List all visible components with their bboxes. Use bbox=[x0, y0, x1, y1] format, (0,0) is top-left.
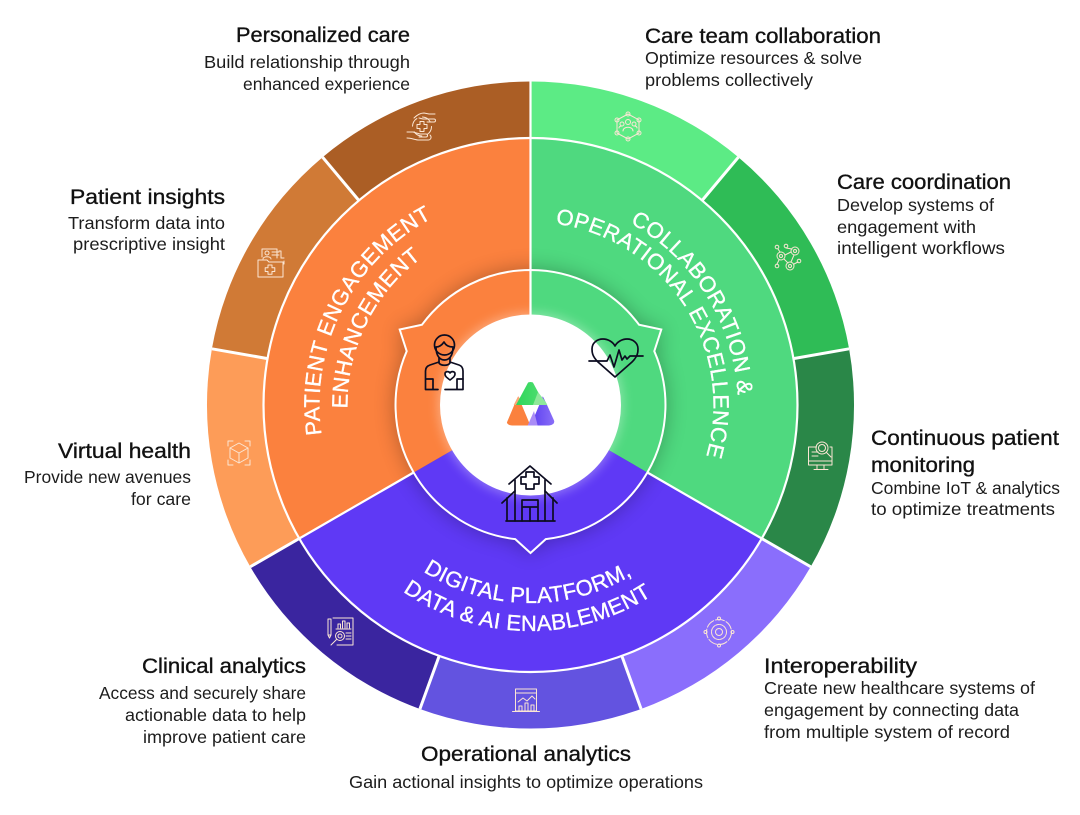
description: intelligent workflows bbox=[837, 238, 1005, 258]
middle ring sectors bbox=[264, 138, 797, 672]
icon: hospital bbox=[502, 466, 557, 521]
label: continuous patient monitoring: monitoring bbox=[871, 454, 975, 477]
heading: Operational analytics bbox=[421, 743, 631, 766]
heading: Care coordination bbox=[837, 171, 1011, 194]
curved title: collaboration: COLLABORATION & bbox=[633, 212, 752, 395]
description: engagement with bbox=[837, 217, 976, 237]
segment: care team collaboration bbox=[530, 82, 738, 405]
curved title: patient engagement enhancement: PATIENT ENGAGEMENT bbox=[304, 205, 428, 435]
segment: care coordination bbox=[530, 157, 849, 405]
outer ring segments bbox=[207, 82, 854, 728]
label: care coordination bbox=[837, 171, 1011, 258]
icon: caring hands bbox=[407, 113, 436, 140]
curved title line 2: OPERATIONAL EXCELLENCE bbox=[557, 210, 729, 459]
segment: personalized care bbox=[323, 82, 530, 405]
heading: Clinical analytics bbox=[142, 655, 306, 678]
ring shadow bbox=[396, 270, 665, 553]
curved title: digital platform: DIGITAL PLATFORM, bbox=[424, 559, 632, 604]
icon: monitoring screen bbox=[808, 442, 832, 470]
heading: Personalized care bbox=[236, 24, 410, 47]
label: interoperability bbox=[764, 655, 1035, 742]
label: clinical analytics bbox=[99, 655, 306, 747]
description: problems collectively bbox=[645, 70, 813, 90]
heading: Interoperability bbox=[764, 655, 918, 678]
segment: virtual health bbox=[207, 349, 530, 567]
segment: clinical analytics bbox=[250, 405, 531, 709]
segment: patient insights bbox=[212, 157, 530, 405]
sector: patient engagement bbox=[264, 138, 530, 538]
description bbox=[871, 478, 1060, 519]
icon: interoperability gear bbox=[704, 617, 734, 647]
label: personalized care bbox=[204, 24, 410, 94]
sector: digital platform bbox=[299, 405, 762, 672]
sector: collaboration bbox=[530, 138, 797, 538]
description: Combine IoT & analytics bbox=[871, 478, 1060, 498]
description: Provide new avenues bbox=[24, 467, 191, 487]
center circle bbox=[438, 312, 624, 498]
description bbox=[204, 52, 410, 94]
label: continuous patient monitoring bbox=[871, 427, 1060, 519]
description: for care bbox=[131, 489, 191, 509]
icon: virtual cube bbox=[228, 441, 250, 465]
description: from multiple system of record bbox=[764, 722, 1010, 742]
icon: team network bbox=[615, 112, 641, 141]
description: Develop systems of bbox=[837, 195, 994, 215]
description: enhanced experience bbox=[243, 74, 410, 94]
inner notched ring bbox=[396, 271, 664, 552]
description: actionable data to help bbox=[125, 705, 306, 725]
heading: Continuous patient bbox=[871, 427, 1059, 450]
icon: patient bbox=[426, 335, 463, 390]
label: patient insights bbox=[68, 186, 225, 254]
description bbox=[99, 683, 306, 747]
description: Access and securely share bbox=[99, 683, 306, 703]
icon: heart with pulse bbox=[589, 339, 643, 377]
segment: interoperability bbox=[530, 405, 811, 709]
segment: operational analytics bbox=[420, 405, 641, 728]
heading: Virtual health bbox=[58, 440, 191, 463]
label: operational analytics bbox=[349, 743, 703, 792]
description: prescriptive insight bbox=[73, 234, 225, 254]
curved title line 2: DATA & AI ENABLEMENT bbox=[404, 580, 648, 632]
segment: continuous patient monitoring bbox=[530, 349, 854, 567]
icon: patient folder bbox=[258, 249, 284, 277]
white dividers bbox=[212, 81, 849, 709]
heading: Patient insights bbox=[70, 186, 225, 209]
description bbox=[645, 48, 862, 90]
description: Build relationship through bbox=[204, 52, 410, 72]
description bbox=[837, 195, 1005, 258]
description: Optimize resources & solve bbox=[645, 48, 862, 68]
description: Transform data into bbox=[68, 213, 225, 233]
label: care team collaboration bbox=[645, 25, 881, 90]
label: virtual health bbox=[24, 440, 191, 509]
description bbox=[68, 213, 225, 254]
description bbox=[24, 467, 191, 509]
icon: care coordination bbox=[775, 244, 801, 270]
description: Gain actional insights to optimize operations bbox=[349, 772, 703, 792]
description: to optimize treatments bbox=[871, 499, 1055, 519]
icon: operational dashboard bbox=[512, 689, 540, 712]
description: engagement by connecting data bbox=[764, 700, 1019, 720]
description: Create new healthcare systems of bbox=[764, 678, 1035, 698]
description: improve patient care bbox=[143, 727, 306, 747]
logo bbox=[506, 382, 554, 426]
curved title line 2: ENHANCEMENT bbox=[332, 246, 417, 407]
heading: Care team collaboration bbox=[645, 25, 881, 48]
description bbox=[764, 678, 1035, 742]
icon: clinical report bbox=[328, 618, 353, 645]
